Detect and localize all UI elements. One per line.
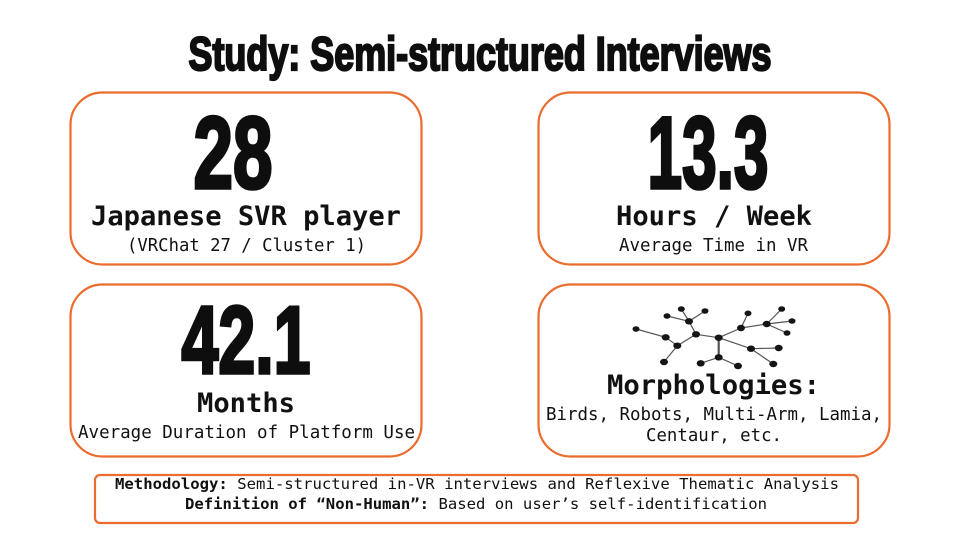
number: 13.3: 13.3 bbox=[648, 96, 768, 210]
text: morphology list line 1: Birds, Robots, Multi-Arm, Lamia, bbox=[546, 404, 882, 425]
text: definition of non-human: Definition of “Non-Human”: Based on user’s self-identification bbox=[185, 495, 767, 513]
number: 28: 28 bbox=[194, 96, 272, 210]
panel: months bbox=[70, 284, 422, 456]
heading: Months: Months bbox=[197, 388, 295, 419]
panel: participants bbox=[70, 92, 422, 264]
title: Study: Semi-structured Interviews bbox=[188, 27, 772, 80]
heading: Japanese SVR player: Japanese SVR player bbox=[91, 201, 401, 232]
heading: Hours / Week: Hours / Week bbox=[616, 201, 812, 232]
panel: hours per week bbox=[538, 92, 890, 264]
number: 42.1: 42.1 bbox=[182, 287, 310, 394]
heading: Morphologies: Morphologies: bbox=[607, 370, 820, 401]
text: average duration: Average Duration of Platform Use bbox=[78, 422, 415, 443]
text: platform split: (VRChat 27 / Cluster 1) bbox=[127, 235, 366, 256]
panel: methodology note bbox=[95, 475, 858, 523]
text: average time in VR: Average Time in VR bbox=[619, 235, 808, 256]
text: methodology: Methodology: Semi-structured in-VR interviews and Reflexive Thematic Analysis bbox=[115, 475, 839, 493]
icon: network graph bbox=[632, 306, 796, 369]
panel: morphologies bbox=[538, 284, 890, 456]
text: morphology list line 2: Centaur, etc. bbox=[646, 425, 782, 446]
